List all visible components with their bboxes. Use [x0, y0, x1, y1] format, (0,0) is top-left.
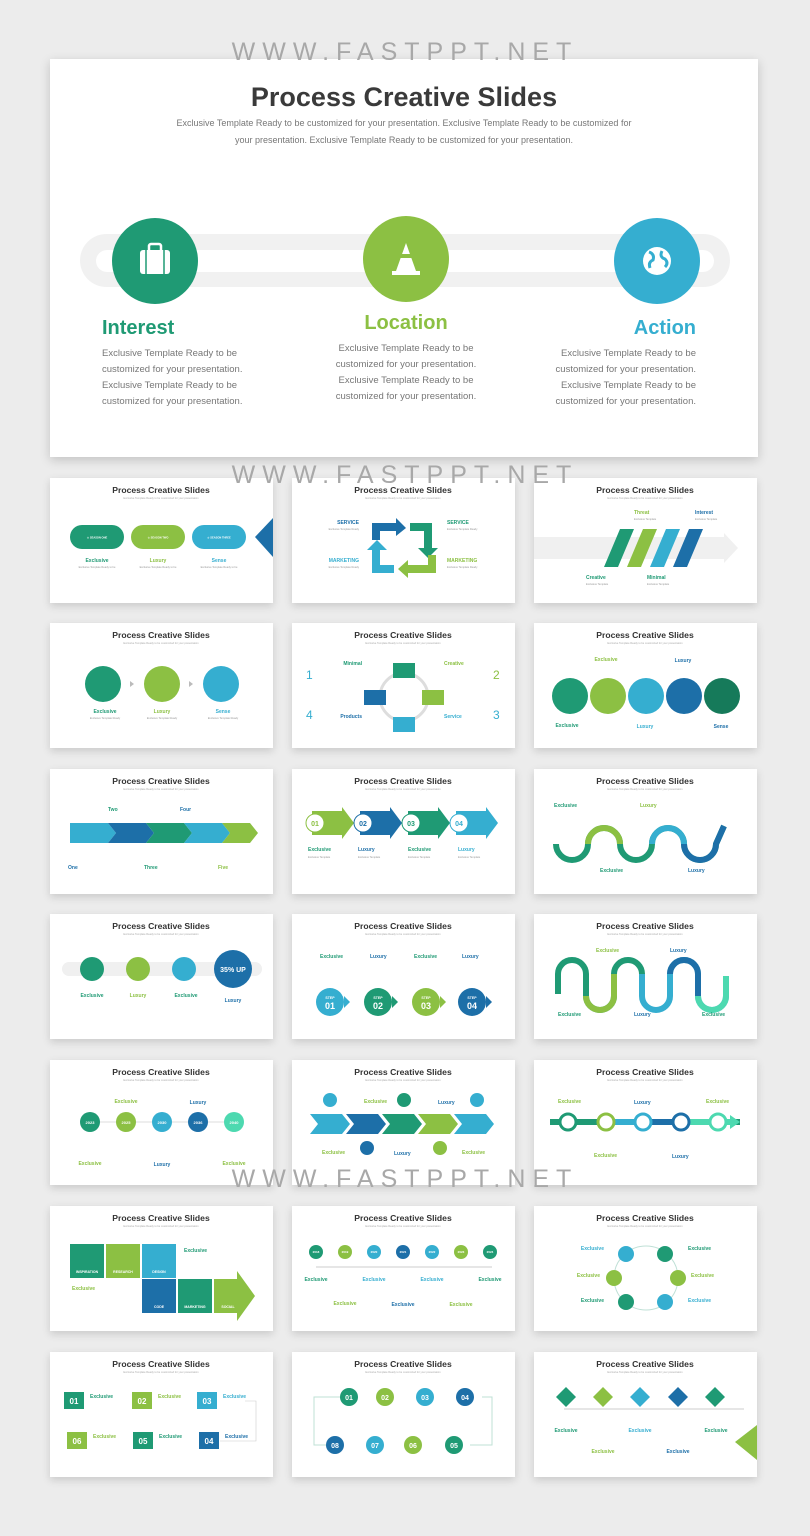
panel: thumb 17 hex timeline: Exclusive [478, 1277, 502, 1283]
panel: thumb 1 pills: ☆ SEASON ONE [87, 536, 107, 540]
panel: thumb 17 hex timeline [292, 1206, 515, 1331]
panel: thumb 15 ring arrows [534, 1060, 757, 1185]
panel: thumb 1 pills: ☆ SEASON THREE [207, 536, 231, 540]
panel: thumb 18 circle icons: Process Creative Slides [596, 1213, 694, 1223]
panel: thumb 8 numbered arrows: 04 [455, 821, 463, 828]
panel: thumb 18 circle icons: Exclusive [688, 1246, 711, 1252]
panel: thumb 3 ribbon arrow: Exclusive Template Ready to be customized for your presentation [607, 496, 683, 500]
panel: thumb 6 five circles: Luxury [637, 724, 654, 730]
panel: thumb 20 eight circles: Exclusive Template Ready to be customized for your presentation [365, 1370, 441, 1374]
panel: thumb 10 35% up: 35% UP [220, 967, 246, 974]
panel: thumb 4 circles [50, 623, 273, 748]
panel: thumb 9 wave: Exclusive Template Ready to be customized for your presentation [607, 787, 683, 791]
panel: thumb 4 circles: Exclusive Template Ready [90, 716, 121, 720]
panel: thumb 5 squares cycle: Products [340, 714, 362, 720]
panel: thumb 2 cycle [292, 478, 515, 603]
panel: thumb 8 numbered arrows: Luxury [358, 847, 375, 853]
subtitle: Exclusive Template Ready to be customized for your presentation. Exclusive Template Ready to be customized for your presentation. Exclusive Template Ready to be customized for your presentation. [177, 118, 631, 145]
panel: thumb 1 pills: Exclusive Template Ready to be [79, 565, 116, 569]
panel: thumb 14 arrow chain: Luxury [394, 1151, 411, 1157]
panel: thumb 21 diamonds: Exclusive [704, 1428, 728, 1434]
panel: thumb 2 cycle: Exclusive Template Ready [447, 527, 478, 531]
panel: thumb 8 numbered arrows: Exclusive Template [458, 855, 481, 859]
panel: thumb 2 cycle: MARKETING [329, 558, 359, 564]
process track with icons [80, 216, 730, 304]
panel: thumb 19 numbered boxes: 04 [205, 1437, 214, 1446]
panel: thumb 14 arrow chain: Process Creative Slides [354, 1067, 452, 1077]
panel: thumb 2 cycle: SERVICE [337, 520, 360, 526]
panel: thumb 20 eight circles: 01 [345, 1395, 353, 1402]
panel: thumb 8 numbered arrows: Exclusive Template Ready to be customized for your presentation [365, 787, 441, 791]
panel: thumb 1 pills: Exclusive [85, 558, 109, 564]
panel: thumb 13 years: Exclusive [222, 1161, 246, 1167]
panel: thumb 17 hex timeline: Exclusive [362, 1277, 386, 1283]
panel: thumb 21 diamonds: Process Creative Slides [596, 1359, 694, 1369]
panel: thumb 15 ring arrows: Luxury [634, 1100, 651, 1106]
panel: thumb 17 hex timeline: Exclusive Template Ready to be customized for your presentation [365, 1224, 441, 1228]
panel: thumb 15 ring arrows: Exclusive [594, 1153, 617, 1159]
step: Location: Location [364, 312, 448, 334]
panel: thumb 21 diamonds: Exclusive [628, 1428, 652, 1434]
panel: thumb 5 squares cycle: Service [444, 714, 462, 720]
panel: thumb 10 35% up: Luxury [130, 993, 147, 999]
panel: thumb 18 circle icons: Exclusive [688, 1298, 711, 1304]
panel: thumb 1 pills: Process Creative Slides [112, 485, 210, 495]
icon: cone [363, 216, 449, 302]
panel: thumb 8 numbered arrows: 01 [311, 821, 319, 828]
panel: thumb 16 blocks: RESEARCH [113, 1270, 133, 1274]
panel: thumb 19 numbered boxes: Exclusive [93, 1434, 116, 1440]
panel: thumb 18 circle icons: Exclusive [581, 1246, 604, 1252]
panel: thumb 16 blocks: MARKETING [184, 1305, 206, 1309]
panel: thumb 3 ribbon arrow: Exclusive Template [695, 517, 718, 521]
panel: thumb 13 years: 2030 [158, 1120, 167, 1125]
panel: thumb 17 hex timeline: 2021 [400, 1250, 407, 1254]
panel: thumb 1 pills [50, 478, 273, 603]
panel: thumb 16 blocks: Exclusive Template Ready to be customized for your presentation [123, 1224, 199, 1228]
panel: thumb 14 arrow chain: Exclusive [322, 1150, 345, 1156]
panel: thumb 19 numbered boxes: 06 [73, 1437, 82, 1446]
panel: thumb 11 steps: 01 [325, 1001, 335, 1011]
panel: thumb 17 hex timeline: 2019 [342, 1250, 349, 1254]
panel: thumb 2 cycle: Exclusive Template Ready [447, 565, 478, 569]
panel: thumb 14 arrow chain: Exclusive [462, 1150, 485, 1156]
panel: thumb 12 snake: Exclusive [596, 948, 619, 954]
title: Process Creative Slides [251, 82, 557, 112]
panel: thumb 19 numbered boxes: 01 [70, 1397, 79, 1406]
panel: thumb 9 wave: Exclusive [600, 868, 623, 874]
panel: thumb 9 wave: Luxury [640, 803, 657, 809]
panel: thumb 11 steps: STEP [325, 996, 335, 1000]
panel: thumb 10 35% up: Exclusive Template Ready to be customized for your presentation [123, 932, 199, 936]
panel: thumb 13 years: 2036 [194, 1120, 203, 1125]
step: Action [556, 317, 696, 407]
panel: thumb 12 snake: Process Creative Slides [596, 921, 694, 931]
panel: thumb 3 ribbon arrow: Minimal [647, 575, 666, 581]
panel: thumb 19 numbered boxes: 05 [139, 1437, 148, 1446]
panel: thumb 19 numbered boxes: Exclusive [90, 1394, 113, 1400]
panel: thumb 11 steps: STEP [373, 996, 383, 1000]
panel: thumb 10 35% up: Process Creative Slides [112, 921, 210, 931]
panel: thumb 19 numbered boxes: Exclusive [223, 1394, 246, 1400]
panel: thumb 8 numbered arrows: Luxury [458, 847, 475, 853]
panel: thumb 7 chevrons: One [68, 865, 78, 871]
panel: thumb 15 ring arrows: Exclusive [558, 1099, 581, 1105]
panel: thumb 14 arrow chain [292, 1060, 515, 1185]
panel: thumb 8 numbered arrows: Exclusive Template [308, 855, 331, 859]
panel: thumb 8 numbered arrows: Exclusive [308, 847, 331, 853]
panel: thumb 7 chevrons: Three [144, 865, 158, 871]
panel: thumb 19 numbered boxes: 02 [138, 1397, 147, 1406]
panel: thumb 6 five circles: Exclusive [555, 723, 579, 729]
step: Location: Exclusive Template Ready to be customized for your presentation. Exclusive Template Ready to be customized for your presentation. [336, 343, 476, 402]
panel: thumb 17 hex timeline: 2022 [429, 1250, 436, 1254]
panel: thumb 7 chevrons: Four [180, 807, 191, 813]
panel: thumb 13 years: Process Creative Slides [112, 1067, 210, 1077]
panel: thumb 13 years: Exclusive Template Ready to be customized for your presentation [123, 1078, 199, 1082]
panel: thumb 11 steps: Process Creative Slides [354, 921, 452, 931]
panel: thumb 16 blocks: Process Creative Slides [112, 1213, 210, 1223]
panel: thumb 19 numbered boxes [50, 1352, 273, 1477]
panel: thumb 2 cycle: SERVICE [447, 520, 470, 526]
panel: thumb 2 cycle: Exclusive Template Ready [329, 527, 360, 531]
panel: thumb 17 hex timeline: Exclusive [420, 1277, 444, 1283]
panel: thumb 15 ring arrows: Process Creative Slides [596, 1067, 694, 1077]
panel: thumb 2 cycle: MARKETING [447, 558, 477, 564]
panel: thumb 3 ribbon arrow: Exclusive Template [586, 582, 609, 586]
panel: thumb 13 years: 2040 [230, 1120, 239, 1125]
panel: thumb 21 diamonds: Exclusive [666, 1449, 690, 1455]
panel: thumb 20 eight circles: 08 [331, 1443, 339, 1450]
icon: globe [614, 218, 700, 304]
panel: thumb 20 eight circles: Process Creative Slides [354, 1359, 452, 1369]
panel: thumb 13 years: 2025 [122, 1120, 131, 1125]
panel: thumb 10 35% up: Exclusive [174, 993, 198, 999]
panel: thumb 11 steps: Luxury [462, 954, 479, 960]
icon: briefcase [112, 218, 198, 304]
panel: thumb 20 eight circles: 05 [450, 1443, 458, 1450]
panel: thumb 8 numbered arrows: Exclusive Template [408, 855, 431, 859]
panel: thumb 2 cycle: Exclusive Template Ready to be customized for your presentation [365, 496, 441, 500]
panel: thumb 11 steps: Luxury [370, 954, 387, 960]
panel: thumb 20 eight circles: 03 [421, 1395, 429, 1402]
panel: thumb 8 numbered arrows [292, 769, 515, 894]
panel: thumb 16 blocks: Exclusive [72, 1286, 95, 1292]
panel: thumb 4 circles: Exclusive Template Ready to be customized for your presentation [123, 641, 199, 645]
step: Interest: Interest [102, 317, 174, 339]
panel: thumb 16 blocks: CODE [154, 1305, 165, 1309]
panel: thumb 9 wave [534, 769, 757, 894]
step: Interest [102, 317, 242, 407]
panel: thumb 8 numbered arrows: 02 [359, 821, 367, 828]
panel: thumb 15 ring arrows: Exclusive [706, 1099, 729, 1105]
panel: thumb 5 squares cycle: 1 [306, 668, 313, 682]
panel: thumb 17 hex timeline: Exclusive [304, 1277, 328, 1283]
panel: thumb 8 numbered arrows: Exclusive Template [358, 855, 381, 859]
panel: thumb 5 squares cycle: Process Creative Slides [354, 630, 452, 640]
step: Location [336, 312, 476, 402]
panel: thumb 10 35% up [50, 914, 273, 1039]
panel: thumb 11 steps: Exclusive [414, 954, 437, 960]
panel: thumb 3 ribbon arrow [534, 478, 757, 603]
panel: thumb 12 snake: Luxury [670, 948, 687, 954]
panel: thumb 17 hex timeline: 2018 [313, 1250, 320, 1254]
panel: thumb 4 circles: Exclusive Template Ready [147, 716, 178, 720]
panel: thumb 18 circle icons [534, 1206, 757, 1331]
panel: thumb 15 ring arrows: Luxury [672, 1154, 689, 1160]
panel: thumb 19 numbered boxes: Process Creative Slides [112, 1359, 210, 1369]
panel: thumb 13 years: Exclusive [78, 1161, 102, 1167]
panel: thumb 14 arrow chain: Exclusive Template Ready to be customized for your presentation [365, 1078, 441, 1082]
panel: thumb 1 pills: Exclusive Template Ready to be customized for your presentation [123, 496, 199, 500]
panel: thumb 21 diamonds: Exclusive Template Ready to be customized for your presentation [607, 1370, 683, 1374]
panel: thumb 17 hex timeline: 2024 [487, 1250, 494, 1254]
panel: thumb 6 five circles: Exclusive Template Ready to be customized for your presentation [607, 641, 683, 645]
panel: thumb 13 years: 2023 [86, 1120, 95, 1125]
step: Action: Action [634, 317, 696, 339]
panel: thumb 8 numbered arrows: Exclusive [408, 847, 431, 853]
panel: thumb 3 ribbon arrow: Exclusive Template [647, 582, 670, 586]
panel: thumb 10 35% up: Luxury [225, 998, 242, 1004]
watermark: WWW.FASTPPT.NET [232, 461, 578, 489]
panel: thumb 13 years: Luxury [154, 1162, 171, 1168]
panel: thumb 4 circles: Exclusive [93, 709, 117, 715]
panel: thumb 5 squares cycle: Exclusive Template Ready to be customized for your presentation [365, 641, 441, 645]
panel: thumb 2 cycle: Exclusive Template Ready [329, 565, 360, 569]
panel: thumb 6 five circles: Sense [714, 724, 729, 730]
panel: thumb 18 circle icons: Exclusive Template Ready to be customized for your presentation [607, 1224, 683, 1228]
panel: thumb 12 snake [534, 914, 757, 1039]
panel: thumb 10 35% up: Exclusive [80, 993, 104, 999]
panel: thumb 17 hex timeline: Exclusive [391, 1302, 415, 1308]
panel: thumb 17 hex timeline: Exclusive [333, 1301, 357, 1307]
panel: thumb 16 blocks: Exclusive [184, 1248, 207, 1254]
panel: thumb 1 pills: ☆ SEASON TWO [148, 536, 168, 540]
panel: thumb 16 blocks: SOCIAL [221, 1305, 235, 1309]
panel: thumb 17 hex timeline: Process Creative Slides [354, 1213, 452, 1223]
panel: thumb 5 squares cycle [292, 623, 515, 748]
panel: thumb 6 five circles: Luxury [675, 658, 692, 664]
panel: thumb 20 eight circles: 06 [409, 1443, 417, 1450]
panel: thumb 19 numbered boxes: Exclusive Template Ready to be customized for your presentation [123, 1370, 199, 1374]
panel: thumb 14 arrow chain: Exclusive [364, 1099, 387, 1105]
panel: thumb 12 snake: Luxury [634, 1012, 651, 1018]
panel: thumb 15 ring arrows: Exclusive Template Ready to be customized for your presentation [607, 1078, 683, 1082]
panel: thumb 11 steps [292, 914, 515, 1039]
panel: thumb 1 pills: Sense [212, 558, 227, 564]
panel: thumb 14 arrow chain: Luxury [438, 1100, 455, 1106]
panel: thumb 18 circle icons: Exclusive [581, 1298, 604, 1304]
panel: thumb 21 diamonds [534, 1352, 757, 1477]
panel: thumb 17 hex timeline: 2020 [371, 1250, 378, 1254]
panel: thumb 3 ribbon arrow: Threat [634, 510, 650, 516]
panel: thumb 3 ribbon arrow: Creative [586, 575, 606, 581]
panel: thumb 7 chevrons: Five [218, 865, 228, 871]
panel: thumb 16 blocks: INSPIRATION [76, 1270, 99, 1274]
panel: thumb 7 chevrons [50, 769, 273, 894]
panel: thumb 13 years: Luxury [190, 1100, 207, 1106]
watermark: WWW.FASTPPT.NET [232, 1165, 578, 1193]
panel: thumb 7 chevrons: Exclusive Template Ready to be customized for your presentation [123, 787, 199, 791]
panel: thumb 20 eight circles [292, 1352, 515, 1477]
panel: thumb 5 squares cycle: Minimal [343, 661, 363, 667]
panel: thumb 6 five circles: Process Creative Slides [596, 630, 694, 640]
panel: thumb 17 hex timeline: Exclusive [449, 1302, 473, 1308]
step: Interest: Exclusive Template Ready to be customized for your presentation. Exclusive Template Ready to be customized for your presentation. [102, 348, 242, 407]
step: Action: Exclusive Template Ready to be customized for your presentation. Exclusive Template Ready to be customized for your presentation. [556, 348, 696, 407]
panel: thumb 11 steps: STEP [421, 996, 431, 1000]
panel: thumb 11 steps: 03 [421, 1001, 431, 1011]
panel: thumb 12 snake: Exclusive [702, 1012, 725, 1018]
panel: thumb 2 cycle: Process Creative Slides [354, 485, 452, 495]
panel: thumb 19 numbered boxes: Exclusive [159, 1434, 182, 1440]
panel: thumb 20 eight circles: 07 [371, 1443, 379, 1450]
panel: thumb 4 circles: Sense [216, 709, 231, 715]
panel: thumb 1 pills: Exclusive Template Ready to be [140, 565, 177, 569]
panel: thumb 4 circles: Exclusive Template Ready [208, 716, 239, 720]
panel: thumb 9 wave: Exclusive [554, 803, 577, 809]
panel: thumb 16 blocks: DESIGN [152, 1270, 166, 1274]
panel: thumb 17 hex timeline: 2023 [458, 1250, 465, 1254]
panel: thumb 8 numbered arrows: 03 [407, 821, 415, 828]
panel: thumb 12 snake: Exclusive [558, 1012, 581, 1018]
panel: thumb 1 pills: Luxury [150, 558, 167, 564]
panel: thumb 6 five circles: Exclusive [594, 657, 618, 663]
panel: thumb 1 pills: Exclusive Template Ready to be [201, 565, 238, 569]
panel: thumb 18 circle icons: Exclusive [691, 1273, 714, 1279]
panel: thumb 4 circles: Process Creative Slides [112, 630, 210, 640]
panel: thumb 20 eight circles: 04 [461, 1395, 469, 1402]
panel: thumb 20 eight circles: 02 [381, 1395, 389, 1402]
panel: thumb 3 ribbon arrow: Exclusive Template [634, 517, 657, 521]
panel: thumb 7 chevrons: Process Creative Slides [112, 776, 210, 786]
watermark: WWW.FASTPPT.NET [232, 38, 578, 66]
panel: thumb 5 squares cycle: 3 [493, 708, 500, 722]
panel: thumb 11 steps: Exclusive Template Ready to be customized for your presentation [365, 932, 441, 936]
panel: thumb 21 diamonds: Exclusive [554, 1428, 578, 1434]
panel: thumb 19 numbered boxes: Exclusive [225, 1434, 248, 1440]
panel: thumb 5 squares cycle: Creative [444, 661, 464, 667]
panel: thumb 7 chevrons: Two [108, 807, 118, 813]
panel: thumb 11 steps: 02 [373, 1001, 383, 1011]
panel: thumb 21 diamonds: Exclusive [591, 1449, 615, 1455]
panel: thumb 9 wave: Process Creative Slides [596, 776, 694, 786]
panel: thumb 11 steps: 04 [467, 1001, 477, 1011]
panel: thumb 3 ribbon arrow: Interest [695, 510, 713, 516]
panel: thumb 3 ribbon arrow: Process Creative Slides [596, 485, 694, 495]
panel: thumb 8 numbered arrows: Process Creative Slides [354, 776, 452, 786]
panel: thumb 13 years [50, 1060, 273, 1185]
panel: thumb 13 years: Exclusive [114, 1099, 138, 1105]
panel: thumb 11 steps: Exclusive [320, 954, 343, 960]
panel: thumb 9 wave: Luxury [688, 868, 705, 874]
panel: thumb 4 circles: Luxury [154, 709, 171, 715]
panel: thumb 5 squares cycle: 4 [306, 708, 313, 722]
panel: thumb 19 numbered boxes: 03 [203, 1397, 212, 1406]
panel: thumb 12 snake: Exclusive Template Ready to be customized for your presentation [607, 932, 683, 936]
panel: thumb 16 blocks [50, 1206, 273, 1331]
panel: main slide [50, 59, 758, 457]
panel: thumb 19 numbered boxes: Exclusive [158, 1394, 181, 1400]
panel: thumb 18 circle icons: Exclusive [577, 1273, 600, 1279]
panel: thumb 6 five circles [534, 623, 757, 748]
panel: thumb 5 squares cycle: 2 [493, 668, 500, 682]
panel: thumb 11 steps: STEP [467, 996, 477, 1000]
